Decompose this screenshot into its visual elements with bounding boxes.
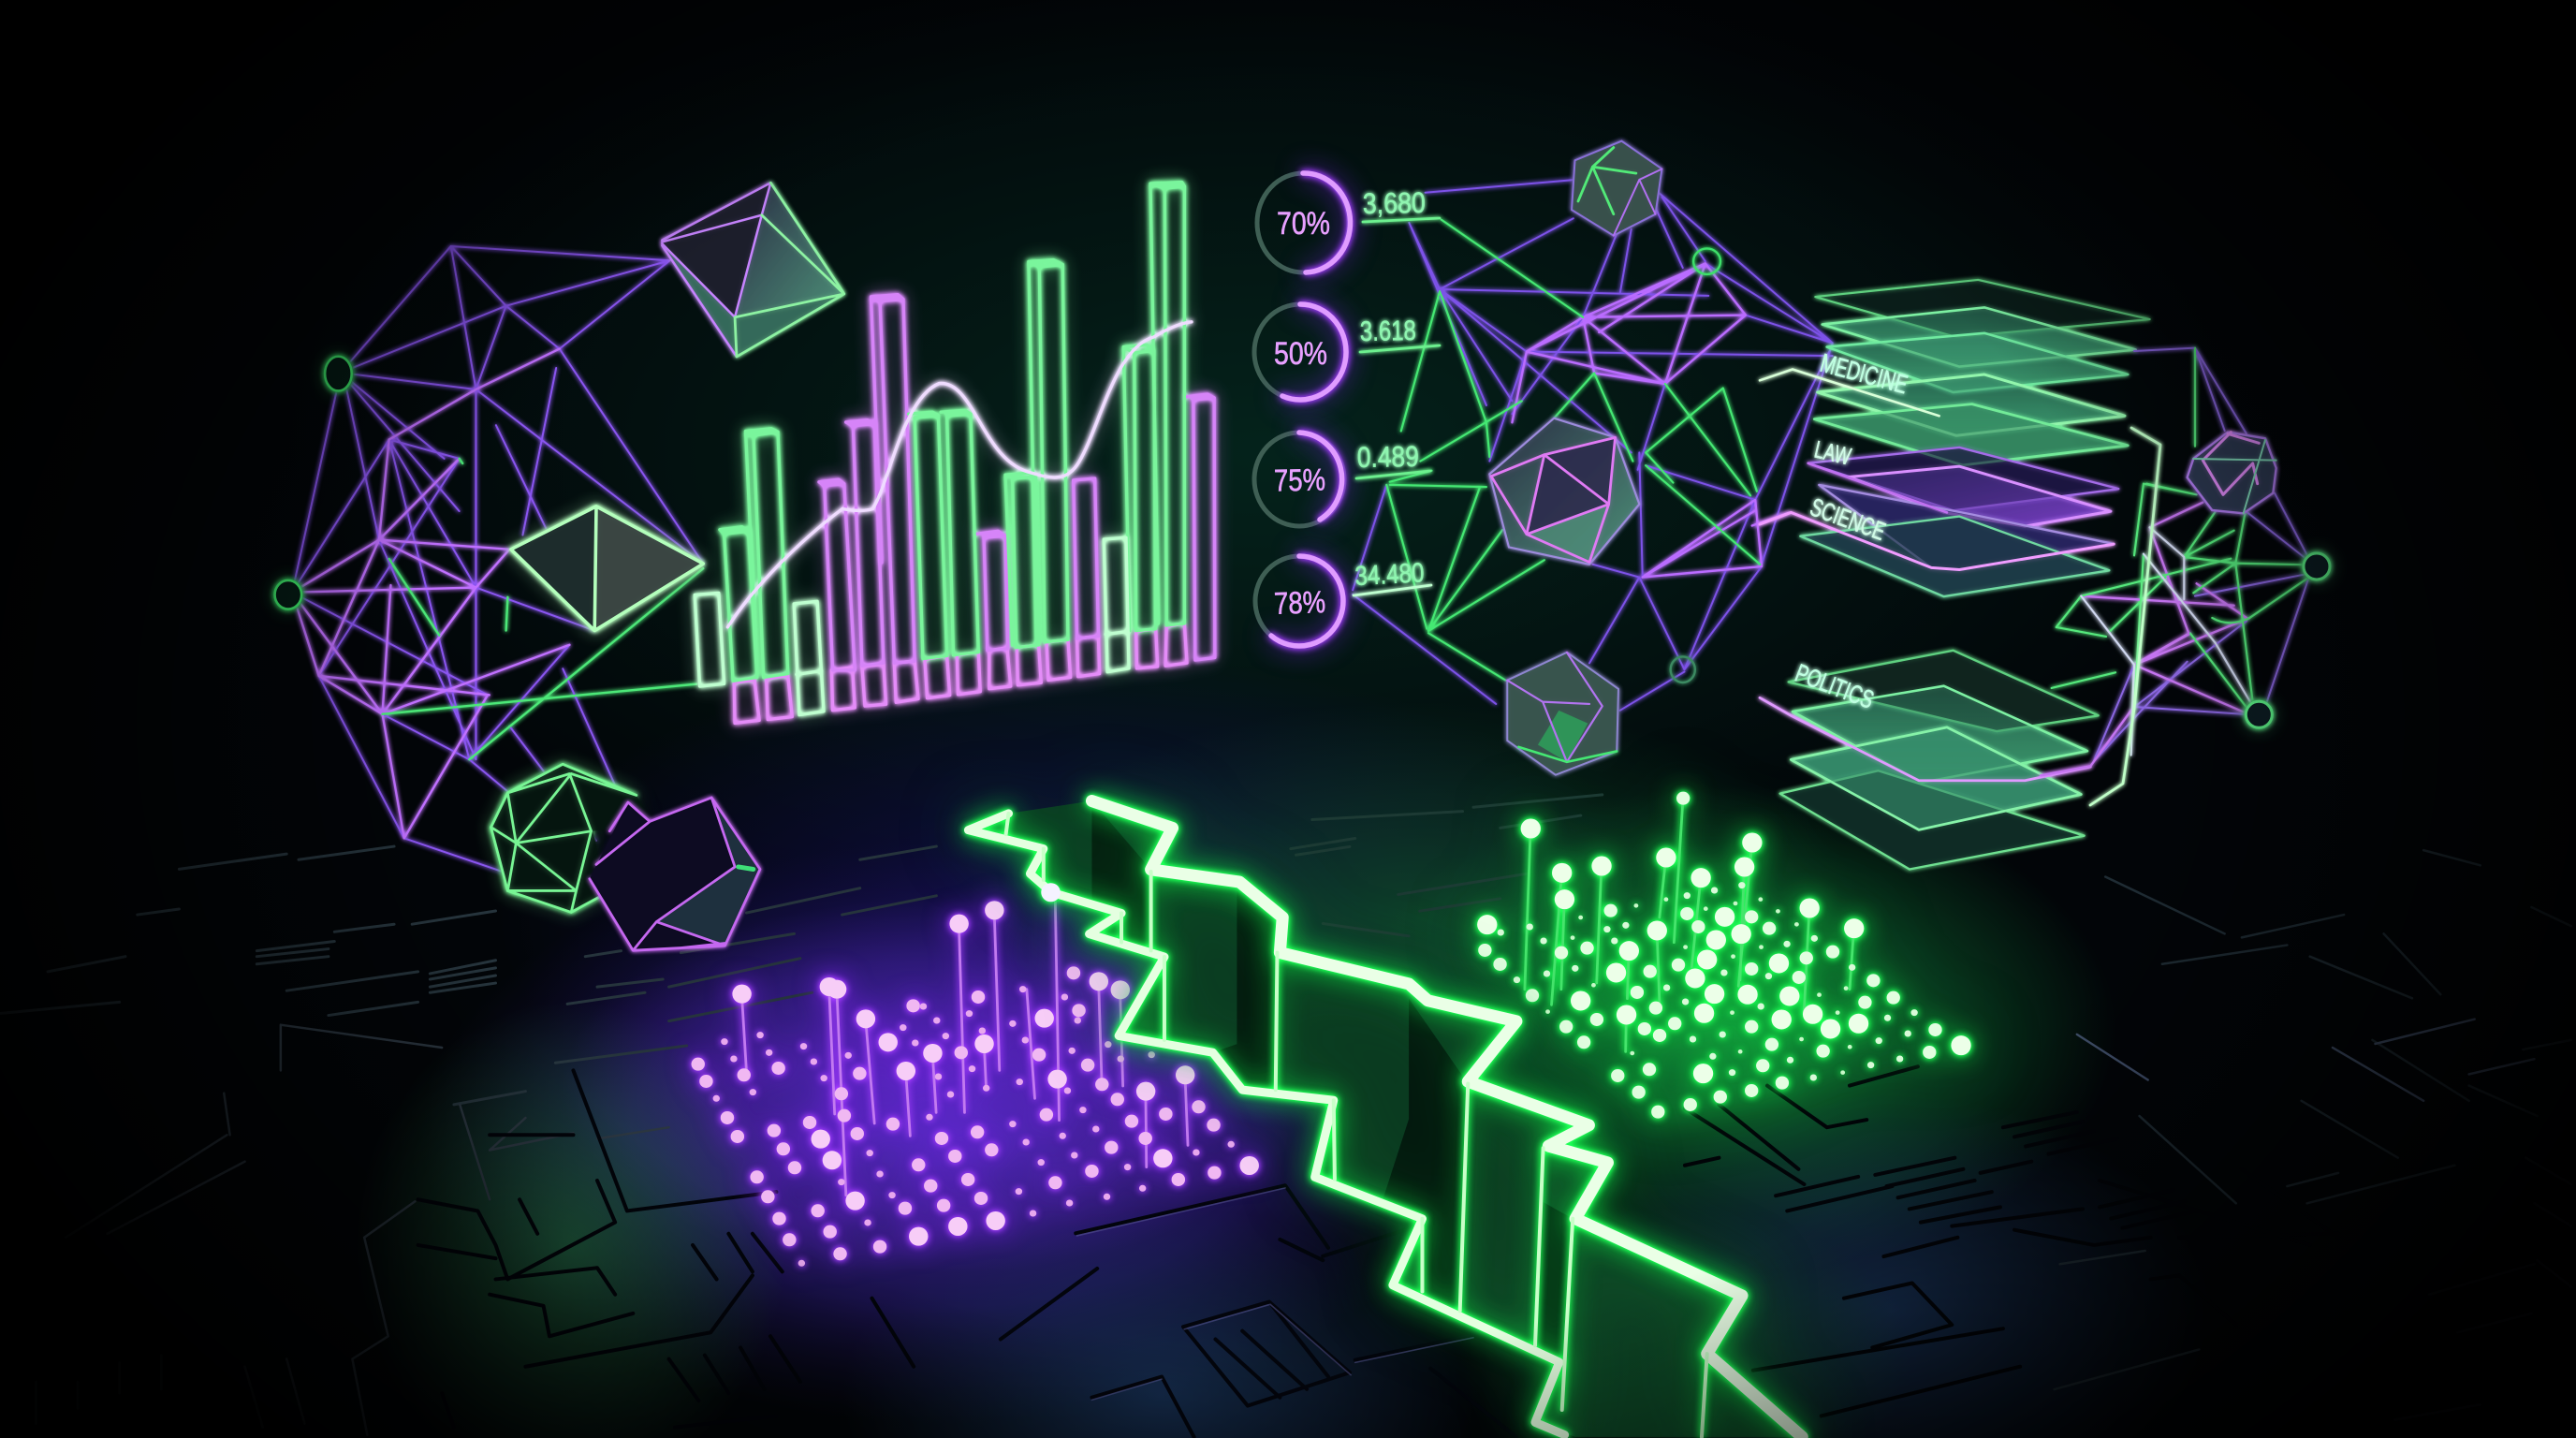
medicine rail: [1760, 370, 1939, 416]
layer 12: [1791, 727, 2081, 829]
readout 3.618: 3.618: [1360, 315, 1416, 347]
green data point field: [1485, 799, 1961, 1112]
small dots: [716, 990, 1231, 1263]
floor circuit traces centre: [1001, 795, 1603, 1437]
right ring nodes: [2246, 553, 2330, 727]
layer 11: [1793, 686, 2087, 783]
readout 0.489: 0.489: [1357, 440, 1419, 474]
layer 1 outline: [1815, 280, 2150, 337]
progress ring 75%: [1254, 433, 1344, 526]
wall edges: [1006, 814, 1707, 1437]
centre ring nodes: [1671, 248, 1720, 682]
science bright rail: [1760, 512, 2114, 569]
green bars: [720, 183, 1184, 681]
layer 10: [1789, 651, 2099, 731]
stems: [1525, 799, 1854, 1051]
layer 8 purple: [1819, 485, 2114, 569]
layer 2: [1822, 307, 2136, 367]
wireframe diamond green: [511, 506, 703, 631]
left network mesh: [292, 246, 703, 874]
large dots: [1487, 829, 1961, 1074]
lower edge: [968, 814, 1565, 1435]
fissure interior: [968, 801, 1802, 1437]
stems: [741, 892, 1188, 1196]
layer 4: [1818, 374, 2125, 435]
progress ring 50%: 50%: [1274, 336, 1327, 372]
wireframe polyhedron green: [491, 764, 650, 912]
layer 6 purple: [1808, 448, 2118, 510]
bright junction node: [1041, 883, 1061, 902]
progress ring 78%: 78%: [1273, 584, 1326, 621]
glowing fissure: [968, 801, 1802, 1437]
data readouts: [1354, 186, 1440, 595]
polyhedron top centre: [1572, 141, 1661, 236]
upper edge: [1091, 801, 1802, 1437]
label medicine: MEDICINE: [1817, 348, 1910, 399]
layer 13: [1780, 770, 2085, 869]
layer stack: medicine law science: [1760, 280, 2150, 596]
right network mesh: [2041, 348, 2309, 775]
pale green bars: [695, 537, 1129, 715]
fissure neon edges: [968, 801, 1802, 1437]
left network ring nodes: [275, 357, 352, 609]
politics rail: [1760, 697, 2090, 781]
wireframe octahedron upper: [662, 183, 844, 357]
readout 34.480: 34.480: [1354, 558, 1425, 592]
bar chart: [695, 183, 1215, 723]
polyhedron bottom centre: [1507, 653, 1618, 775]
lower purple bar segments: [734, 624, 1187, 723]
floor circuit traces right: [1685, 850, 2571, 1420]
wireframe polyhedron purple: [590, 798, 760, 950]
medium dots: [698, 973, 1215, 1254]
progress ring 50%: [1254, 304, 1346, 400]
right bracket connector: [2090, 428, 2160, 805]
progress ring 78%: [1255, 556, 1343, 646]
layer 7 purple bright: [1849, 466, 2111, 526]
label science: SCIENCE: [1807, 492, 1889, 546]
tiny dots: [1547, 900, 1850, 1073]
centre network mesh: [1353, 180, 1833, 711]
trend line: [727, 322, 1192, 627]
layer 3: [1827, 333, 2128, 392]
progress ring 70%: [1257, 173, 1350, 272]
layer 9: [1800, 517, 2109, 596]
polyhedron large centre: [1489, 418, 1639, 565]
purple data point field: [698, 892, 1250, 1263]
law rail: [1808, 463, 1947, 512]
polyhedron right: [2188, 433, 2276, 513]
fissure dark wall facets: [1091, 801, 1573, 1362]
label politics: POLITICS: [1792, 659, 1878, 714]
label law: LAW: [1812, 435, 1854, 471]
panel labels: [1792, 348, 1910, 714]
layer 5: [1814, 404, 2128, 465]
large dots: [741, 910, 1250, 1237]
layer stack: politics: [1760, 651, 2099, 869]
floor circuit traces left: [0, 846, 936, 1435]
small dots: [1500, 886, 1914, 1078]
medium dots: [1485, 799, 1936, 1112]
progress ring 70%: 70%: [1277, 206, 1330, 242]
purple bars: [819, 295, 1215, 670]
progress ring 75%: 75%: [1274, 462, 1325, 497]
readout 3,680: 3,680: [1363, 186, 1426, 220]
